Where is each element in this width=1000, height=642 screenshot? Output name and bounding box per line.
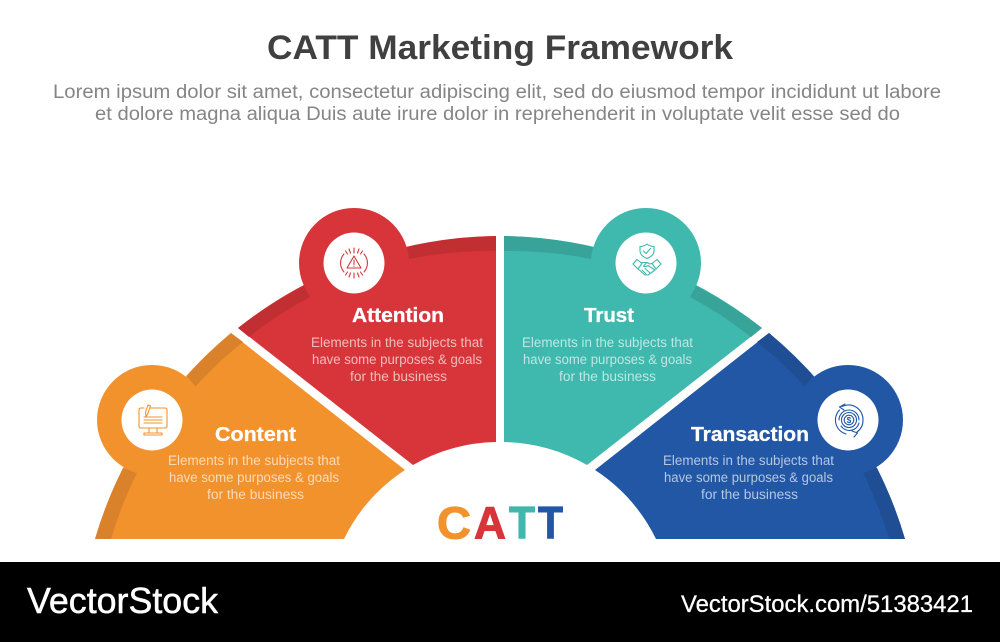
center CATT logo: A [474,498,506,548]
description: Trust: have some purposes & goals [523,352,692,367]
heading: Content: Content [215,424,296,446]
description: Content [168,453,340,502]
heading: Attention: Attention [352,305,444,327]
description: Trust: for the business [559,369,656,384]
description: Attention: Elements in the subjects that [311,335,483,350]
panel: Content [95,333,405,539]
description: Attention: for the business [350,369,447,384]
icon: circulating dollar coin [835,404,863,437]
icon: circulating dollar coin: $ [847,416,852,425]
description: Content: have some purposes & goals [169,470,339,485]
description: Attention [311,335,483,384]
panel: Attention [238,208,496,465]
center CATT logo: C [437,498,471,548]
footer brand: VectorStock [27,580,219,621]
subtitle text block: et dolore magna aliqua Duis aute irure dolor in reprehenderit in voluptate velit esse sed do [95,104,900,125]
center CATT logo: T [538,498,563,548]
subtitle text block: Lorem ipsum dolor sit amet, consectetur adipiscing elit, sed do eiusmod tempor incididunt ut labore [53,82,941,103]
description: Trust [522,335,693,384]
description: Trust: Elements in the subjects that [522,335,693,350]
center CATT logo [437,498,563,548]
footer bar [0,562,1000,642]
description: Content: Elements in the subjects that [168,453,340,468]
description: Transaction [663,453,834,502]
heading: Trust: Trust [584,305,634,327]
description: Content: for the business [207,487,304,502]
footer image reference: VectorStock.com/51383421 [681,591,973,618]
icon: alert triangle [341,248,367,278]
panel: Transaction [595,333,905,539]
description: Transaction: for the business [701,487,798,502]
description: Transaction: Elements in the subjects that [663,453,834,468]
title: CATT Marketing Framework [267,29,733,67]
icon: shield and handshake [633,244,661,275]
icon: monitor with pen [139,405,167,435]
panel: Trust [504,208,762,465]
heading: Transaction: Transaction [691,424,809,446]
center CATT logo: T [509,498,535,548]
subtitle text block [53,82,941,125]
description: Transaction: have some purposes & goals [664,470,833,485]
description: Attention: have some purposes & goals [312,352,482,367]
